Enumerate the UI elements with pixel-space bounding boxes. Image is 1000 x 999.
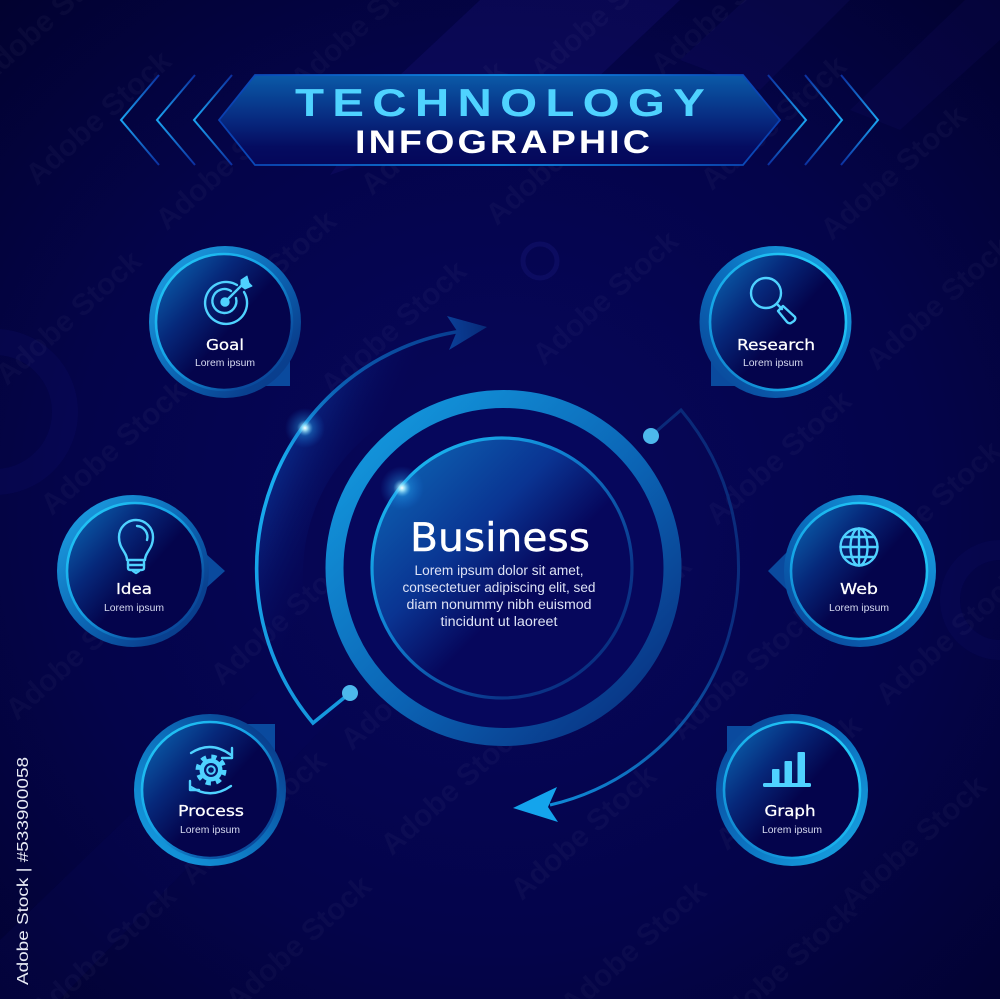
watermark text: Adobe Stock [504,759,663,907]
right chevrons [768,75,878,165]
watermark text: Adobe Stock [174,744,333,892]
label: idea: Idea [116,580,152,598]
sublabel: web: Lorem ipsum [829,602,889,614]
center body text: diam nonummy nibh euismod [406,597,592,612]
label: goal: Goal [206,336,244,354]
icon: globe [840,528,878,566]
banner shape [219,75,780,165]
light flare [380,466,424,510]
center body text [402,563,596,629]
icon: magnifier [751,278,795,323]
heading: infographic: INFOGRAPHIC [355,125,650,160]
left arrow arc [257,316,487,723]
title banner [121,75,878,165]
watermark text: Adobe Stock [526,224,685,372]
watermark text: Adobe Stock [184,204,343,352]
watermark text: Adobe Stock [34,374,193,522]
label: web: Web [840,580,878,598]
center heading: Business [410,516,590,561]
badge: research [700,246,852,398]
watermark text: Adobe Stock [354,54,513,202]
watermark text: Adobe Stock [314,254,473,402]
watermark text: Adobe Stock [19,44,178,192]
sublabel: graph: Lorem ipsum [762,824,822,836]
heading: technology: TECHNOLOGY [295,82,705,125]
watermark text: Adobe Stock [334,609,493,757]
watermark text: Adobe Stock [694,49,853,197]
sublabel: idea: Lorem ipsum [104,602,164,614]
watermark text: Adobe Stock [834,769,993,917]
watermark text: Adobe Stock [364,389,523,537]
watermark text: Adobe Stock [204,544,363,692]
watermark text: Adobe Stock [814,99,973,247]
watermark text: Adobe Stock [699,384,858,532]
watermark text: Adobe Stock [539,549,698,697]
badge: process [134,714,286,866]
badge: idea [57,495,225,647]
sublabel: research: Lorem ipsum [743,357,803,369]
right arrow arc [513,410,739,822]
watermark text: Adobe Stock [664,599,823,747]
badge: web [768,495,936,647]
watermark text: Adobe Stock [709,709,868,857]
sublabel: process: Lorem ipsum [180,824,240,836]
outer ring [334,399,672,737]
central circle [334,399,672,737]
icon: light bulb [119,520,153,573]
inner disc [372,438,632,698]
label: research: Research [737,336,815,354]
watermark text: Adobe Stock [479,84,638,232]
stock number: Adobe Stock | #533900058 [15,757,32,985]
watermark text: Adobe Stock [0,579,158,727]
icon: bar chart [763,752,811,787]
watermark text: Adobe Stock [149,89,308,237]
sublabel: goal: Lorem ipsum [195,357,255,369]
icon: gear with arrows [190,747,232,793]
center body text: tincidunt ut laoreet [440,614,558,629]
watermark text: Adobe Stock [374,714,533,862]
label: process: Process [178,802,244,820]
center body text: Lorem ipsum dolor sit amet, [414,563,584,578]
icon: target [205,276,252,324]
left chevrons [121,75,232,165]
badge: goal [149,246,301,398]
badge: graph [716,714,868,866]
center body text: consectetuer adipiscing elit, sed [402,580,596,595]
label: graph: Graph [764,802,816,820]
